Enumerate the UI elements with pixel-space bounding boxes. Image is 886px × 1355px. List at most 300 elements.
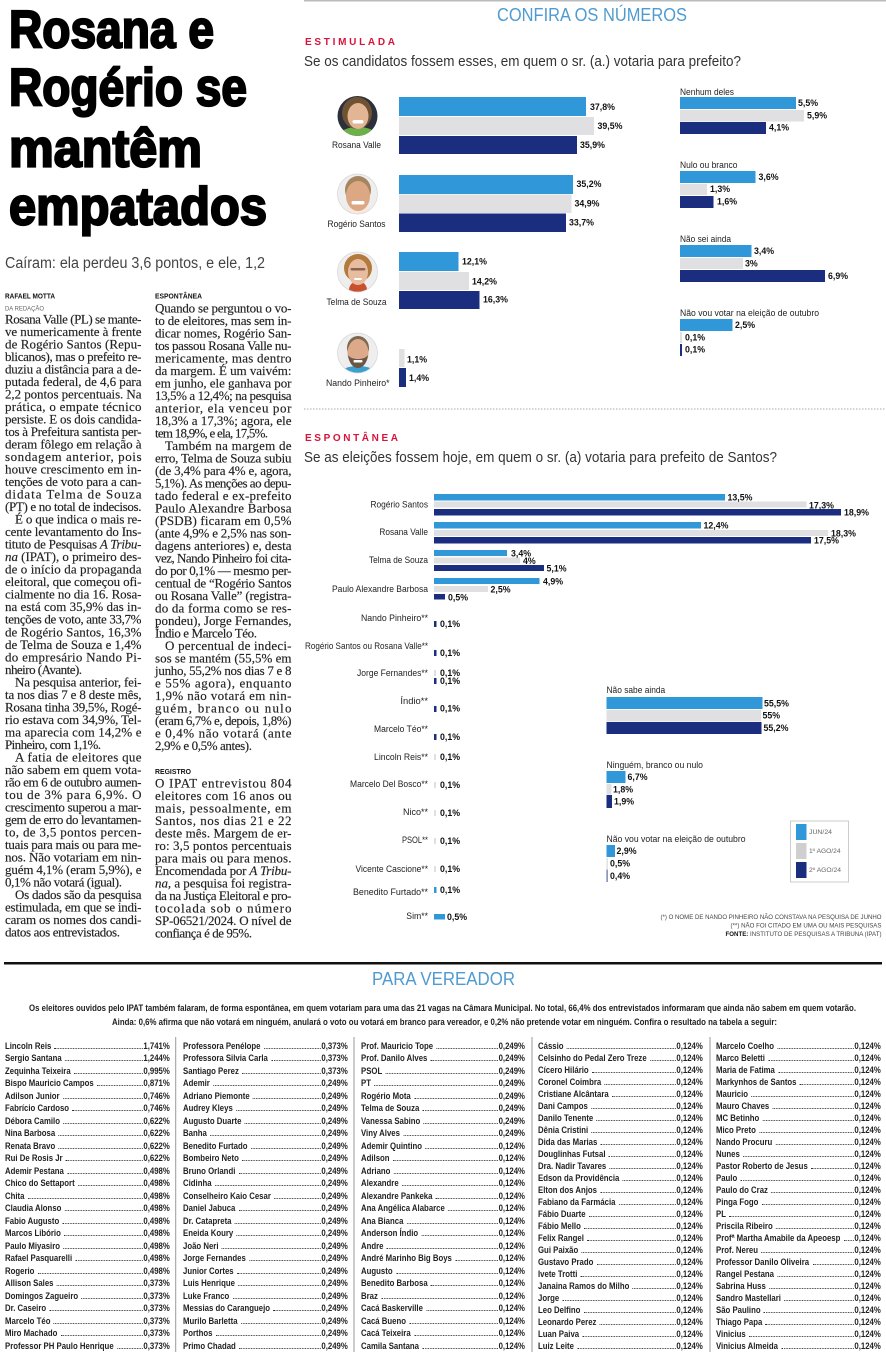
bar chart: espontânea candidates: Benedito Furtado** [353,887,428,897]
table column 1: Marcos Libório 0,498% [5,1228,170,1239]
article text: column 1: Pinheiro, com 1,1%. [5,737,101,752]
bar chart: espontânea candidates: 0,1% [440,808,460,818]
table column 1: Domingos Zagueiro 0,373% [5,1291,170,1302]
candidate: Rogério Santos: 33,7% [569,218,594,228]
article text: column 1: tenções de voto, ante 33,7% [5,612,142,627]
table column 2: Junior Cortes 0,249% [183,1266,348,1277]
article text: column 2: Índio e Marcelo Téo. [155,626,257,640]
table column 4 [538,1040,703,1352]
bar chart: espontânea candidates: Rogério Santos ou Rosana Valle** [305,641,428,651]
table column 2: Eneida Koury 0,249% [183,1228,348,1239]
table column 4: Fabiano da Farmácia 0,124% [538,1197,703,1208]
table column 3: Ana Angélica Alabarce 0,124% [361,1203,525,1214]
table column 1: Miro Machado 0,373% [5,1328,170,1339]
article text: column 2: 18,3% a 17,3%; agora, ele [155,413,292,428]
article text: column 2: Quando se perguntou o vo- [155,300,292,316]
article text: column 2: (PSDB) ficaram em 0,5% [155,513,292,528]
candidate: Rosana Valle: 37,8% [590,102,615,112]
article text: column 2: centual de “Rogério Santos [155,576,292,590]
article text: column 1: nheiro (Avante). [5,662,82,677]
table column 1: Sergio Santana 1,244% [5,1053,170,1064]
article text: column 2: vez, Nando Pinheiro foi cita- [155,550,292,566]
table column 3: Telma de Souza 0,249% [361,1103,525,1114]
table column 2: Jorge Fernandes 0,249% [183,1253,348,1264]
table column 1: Allison Sales 0,373% [5,1278,170,1289]
article text: column 1: prática, o empate técnico [5,399,142,414]
byline: RAFAEL MOTTA [5,294,55,300]
table column 4: Felix Rangel 0,124% [538,1233,703,1244]
table column 4: Fábio Duarte 0,124% [538,1209,703,1220]
legend: 1º AGO/24 [809,848,841,855]
article text: column 1: do empresário Nando Pi- [5,649,142,664]
heading: confira os números: CONFIRA OS NÚMEROS [497,4,687,25]
table column 1: Lincoln Reis 1,741% [5,1040,170,1052]
article text: column 2: 13,5% a 12,4%; na pesquisa [155,388,292,403]
chart: não vou votar: 0,1% [685,332,705,342]
footnotes: (**) NÃO FOI CITADO EM UMA OU MAIS PESQUISAS [730,920,882,930]
table column 2: Luis Henrique 0,249% [183,1278,348,1289]
candidate: Rogério Santos [328,174,602,232]
table column 4: Cícero Hilário 0,124% [538,1065,703,1076]
chart: nulo ou branco: Nulo ou branco [680,160,738,170]
table column 3: Adilson 0,124% [361,1153,525,1164]
table column 3: Augusto 0,124% [361,1266,525,1277]
bar chart: espontânea candidates: 0,1% [440,619,460,629]
candidate: Telma de Souza [326,252,508,309]
candidate: Telma de Souza: 14,2% [472,276,497,286]
article text: column 1: Rosana Valle (PL) se mante- [5,312,142,326]
table column 4: Dênia Cristini 0,124% [538,1125,703,1136]
article text: registro: confiança é de 95%. [155,926,252,940]
table column 1: Nina Barbosa 0,622% [5,1128,170,1139]
table column 5: Nunes 0,124% [716,1149,881,1160]
table column 1: Fabio Augusto 0,498% [5,1216,170,1227]
bar chart: espontânea candidates: Rosana Valle [379,527,428,537]
table column 1: Débora Camilo 0,622% [5,1116,170,1127]
bar chart: espontânea candidates: 4,9% [543,576,563,586]
subheading: registro: REGISTRO [155,769,192,776]
candidate: Rosana Valle: 35,9% [580,140,605,150]
article text: column 1: houve crescimento em in- [5,462,142,477]
footnotes: FONTE: INSTITUTO DE PESQUISAS A TRIBUNA (IPAT) [726,931,882,938]
article text: column 2: pondeu), Jorge Fernandes, [155,613,292,628]
table column 4: Luan Paiva 0,124% [538,1329,703,1340]
table column 4: Jorge 0,124% [538,1293,703,1304]
article text: column 1: de Telma de Souza e 1,4% [5,637,142,652]
chart: não sei ainda: Não sei ainda [680,234,731,244]
chart: não sabe ainda: Não sabe ainda [606,685,665,695]
bar chart: espontânea candidates: Índio** [400,696,429,706]
table column 1: Marcelo Téo 0,373% [5,1316,170,1327]
table column 4: Gustavo Prado 0,124% [538,1257,703,1268]
article text: column 1: tenções de voto para a can- [5,474,142,489]
title: Rogério se [9,58,247,118]
table column 1: Rogerio 0,498% [5,1266,170,1277]
table column 2: Adriano Piemonte 0,249% [183,1091,348,1102]
table column 4: Fábio Mello 0,124% [538,1221,703,1232]
table column 2: Conselheiro Kaio Cesar 0,249% [183,1191,348,1202]
article text: column 2: Paulo Alexandre Barbosa [155,500,292,516]
article text: column 2: (de 3,4% para 4% e, agora, [155,463,292,478]
bar chart: espontânea candidates: 3,4% [511,548,531,558]
table column 3: Rogério Mota 0,249% [361,1091,525,1102]
article text: column 1: eleitoral, que começou ofi- [5,574,142,589]
article text: registro: Santos, nos dias 21 e 22 [155,813,292,828]
table column 4: Celsinho do Pedal Zero Treze 0,124% [538,1053,703,1064]
candidate: Nando Pinheiro [326,333,429,388]
bar chart: espontânea candidates: 5,1% [546,564,567,574]
article text: column 1: guém 4,1% (eram 5,9%), e [5,862,142,877]
table column 3 [361,1040,525,1352]
candidate: Telma de Souza: 16,3% [483,294,508,304]
candidate: Rogério Santos: 35,2% [576,179,602,189]
table column 4: Danilo Tenente 0,124% [538,1113,703,1124]
article text: column 1: na (IPAT), o primeiro des- [5,549,142,564]
candidate: Telma de Souza: 12,1% [462,256,487,266]
chart: nulo ou branco [680,160,779,208]
table column 5 [716,1040,881,1352]
legend: JUN/24 [809,829,832,836]
bar chart: espontânea candidates: 17,3% [809,500,834,510]
article text: column 1: duziu a distância para a de- [5,362,142,377]
chart: não vou votar na eleição [606,834,746,882]
table column 2: Messias do Caranguejo 0,249% [183,1303,348,1314]
icon: portrait Rogério Santos [338,174,377,214]
table column 1: Dr. Caseiro 0,373% [5,1303,170,1314]
table column 5: Maria de Fatima 0,124% [716,1065,881,1076]
chart: ninguém, branco ou nulo: 1,8% [613,784,633,794]
chart: não vou votar: 2,5% [735,320,755,330]
article text: column 2: e 55% agora), enquanto [155,676,292,690]
candidate: Rosana Valle [332,96,623,154]
article text: column 2: (eram 6,7% e, depois, 1,8%) [155,713,292,728]
article text: registro: ro: 3,5 pontos percentuais [155,838,292,853]
candidate: Rosana Valle: 39,5% [598,121,623,131]
table column 4: Dani Campos 0,124% [538,1101,703,1112]
bar chart: espontânea candidates: Sim** [406,911,428,921]
bar chart: espontânea candidates: Rogério Santos [370,500,428,510]
intro text: vereador [29,1003,856,1027]
icon: portrait Nando Pinheiro [338,334,377,373]
article text: column 2: to de eleitores, mas sem in- [155,313,292,328]
table column 3: Benedito Barbosa 0,124% [361,1278,525,1289]
article text: column 2: (ante 4,9% e 2,5% nas son- [155,526,292,540]
table column 5: Pastor Roberto de Jesus 0,124% [716,1161,881,1172]
table column 5: Sandro Mastellari 0,124% [716,1293,881,1304]
chart: não sabe ainda: 55,2% [764,723,789,733]
chart: ninguém, branco ou nulo [606,760,703,808]
table column 5: PL 0,124% [716,1209,881,1220]
table column 3: Adriano 0,124% [361,1166,525,1177]
bar chart: espontânea candidates: 0,1% [440,676,460,686]
article text: column 1: cialmente no dia 16. Rosa- [5,587,142,602]
chart: ninguém, branco ou nulo: 1,9% [614,796,634,806]
subheading: espontânea: ESPONTÂNEA [155,292,202,300]
table column 4: Ivete Trotti 0,124% [538,1269,703,1280]
icon: portrait Telma de Souza [338,252,377,292]
byline [5,294,55,312]
article text: column 2: dagens anteriores) e, desta [155,538,292,553]
article text: registro: deste mês. Margem de er- [155,826,292,840]
table column 3: Vanessa Sabino 0,249% [361,1116,525,1127]
table column 2: Primo Chadad 0,249% [183,1341,348,1352]
table column 5: São Paulino 0,124% [716,1305,881,1316]
chart: não sei ainda: 6,9% [828,271,848,281]
article text: column 1: crescimento superou a mar- [5,799,142,814]
table column 4: Leonardo Perez 0,124% [538,1317,703,1328]
bar chart: espontânea candidates [305,492,869,922]
chart: nenhum deles: 4,1% [769,122,789,132]
article text: column 1: 2,2 pontos percentuais. Na [5,387,142,402]
bar chart: espontânea candidates: Nico** [403,807,428,817]
candidate: Nando Pinheiro: 1,1% [407,354,427,364]
article text: column 1: tuais para mais ou para me- [5,837,142,852]
table column 2: Bruno Orlandi 0,249% [183,1166,348,1177]
footnotes [660,912,882,938]
bar chart: espontânea candidates: 13,5% [728,492,753,502]
article text: column 1: Na pesquisa anterior, fei- [15,674,142,689]
article text: column 2: Também na margem de [165,438,292,453]
table column 2: Bombeiro Neto 0,249% [183,1153,348,1164]
article text: column 1: ve numericamente à frente [5,324,142,339]
table column 4: Janaina Ramos do Milho 0,124% [538,1281,703,1292]
table column 2: Augusto Duarte 0,249% [183,1116,348,1127]
table column 4: Edson da Providência 0,124% [538,1173,703,1184]
candidate: Rogério Santos: 34,9% [574,198,600,208]
table column 1: Paulo Miyasiro 0,498% [5,1241,170,1252]
bar chart: espontânea candidates: 17,5% [814,536,839,546]
bar chart: espontânea candidates: Telma de Souza [369,555,428,565]
table column 3: Anderson Índio 0,124% [361,1228,525,1239]
bar chart: espontânea candidates: 0,1% [440,780,460,790]
article text: column 2: mericamente, mas dentro [155,350,292,366]
chart: não sabe ainda: 55,5% [764,698,789,708]
table column 2: Professora Penélope 0,373% [183,1040,348,1052]
heading: para vereador: PARA VEREADOR [372,969,515,989]
table column 3: PT 0,249% [361,1078,525,1089]
table column 3: Braz 0,124% [361,1291,525,1302]
table column 3: Cacá Bueno 0,124% [361,1316,525,1327]
table column 4: Douglinhas Futsal 0,124% [538,1149,703,1160]
chart: não sei ainda: 3,4% [754,246,774,256]
chart: nulo ou branco: 3,6% [758,172,779,182]
table column 5: Priscila Ribeiro 0,124% [716,1221,881,1232]
article text: registro: tocolada sob o número [155,900,292,916]
chart: ninguém, branco ou nulo: Ninguém, branco ou nulo [606,760,703,770]
table column 3: Ademir Quintino 0,124% [361,1141,525,1152]
table column 2: João Neri 0,249% [183,1241,348,1252]
table column 1: Rafael Pasquarelli 0,498% [5,1253,170,1264]
table column 3: Alexandre Pankeka 0,124% [361,1191,525,1202]
question: estimulada: Se os candidatos fossem esses, em quem o sr. (a.) votaria para prefeito? [304,53,741,70]
table column 5: Sabrina Huss 0,124% [716,1281,881,1292]
bar chart: espontânea candidates: 0,1% [440,732,460,742]
chart: não sei ainda: 3% [745,258,758,268]
table column 2: Ademir 0,249% [183,1078,348,1089]
article text: column 2 [154,300,292,753]
article text: column 1: de o início da propaganda [5,562,142,577]
bar chart: espontânea candidates: Nando Pinheiro** [361,613,428,623]
table column 5: MC Betinho 0,124% [716,1113,881,1124]
bar chart: espontânea candidates: 0,1% [440,885,460,895]
table column 3: PSOL 0,249% [361,1066,525,1077]
article text: registro: Encomendada por A Tribu- [155,863,292,878]
table column 2: Luke Franco 0,249% [183,1291,348,1302]
article text: column 1: É o que indica o mais re- [15,512,142,527]
article text: registro: O IPAT entrevistou 804 [155,776,292,790]
bar chart: espontânea candidates: 0,1% [440,704,460,714]
section label: estimulada: ESTIMULADA [305,37,395,48]
article text: column 1: estimulada, em que se indi- [5,900,142,914]
chart: não sabe ainda [606,685,789,734]
table column 5: Vinicius Almeida 0,124% [716,1341,881,1352]
article text: registro: SP-06521/2024. O nível de [155,913,292,928]
chart: nenhum deles: 5,5% [798,98,818,108]
chart: nenhum deles [680,87,827,134]
table column 2: Dr. Catapreta 0,249% [183,1216,348,1227]
article text: column 1: ta nos dias 7 e 8 deste mês, [5,687,142,702]
table column 5: Profª Martha Amabile da Apeoesp 0,124% [716,1233,881,1244]
table column 4: Dida das Marias 0,124% [538,1137,703,1148]
article text: column 1: nos. Não votariam em nin- [5,849,142,864]
title: empatados [9,178,267,236]
table column 2: Benedito Furtado 0,249% [183,1141,348,1152]
article text: column 2: dicar nomes, Rogério San- [155,326,292,340]
byline: DA REDAÇÃO [5,304,44,312]
bar chart: espontânea candidates: Lincoln Reis** [374,752,428,762]
legend [790,821,848,882]
table column 3: Viny Alves 0,249% [361,1128,525,1139]
table column 4: Cristiane Alcântara 0,124% [538,1089,703,1100]
table column 1: Bispo Mauricio Campos 0,871% [5,1078,170,1089]
bar chart: espontânea candidates: 0,1% [440,648,460,658]
table column 5: Nando Procuru 0,124% [716,1137,881,1148]
bar chart: espontânea candidates: Jorge Fernandes** [357,668,428,678]
article text: registro: mais, pessoalmente, em [155,800,292,816]
article text: column 1: putada federal, de 4,6 para [5,374,142,389]
article text: column 2: 1,9% não votará em nin- [155,688,292,703]
table column 1: Fabrício Cardoso 0,746% [5,1103,170,1114]
bar chart: espontânea candidates: 0,1% [440,864,460,874]
article text: column 1: blicanos), mas o prefeito re- [5,349,142,364]
table column 3: Ana Bianca 0,124% [361,1216,525,1227]
table column 3: Cacá Baskerville 0,124% [361,1303,525,1314]
bar chart: espontânea candidates: 0,1% [440,836,460,846]
table column 3: Prof. Mauricio Tope 0,249% [361,1040,525,1052]
article text: column 1: cente levantamento do Ins- [5,524,142,539]
chart: não vou votar na eleição: 0,5% [610,858,630,868]
table column 5: Rangel Pestana 0,124% [716,1269,881,1280]
article text: column 1: de Rogério Santos, 16,3% [5,624,142,639]
chart: não vou votar: Não vou votar na eleição de outubro [680,308,819,318]
table column 2: Audrey Kleys 0,249% [183,1103,348,1114]
chart: ninguém, branco ou nulo: 6,7% [628,772,648,782]
chart: nenhum deles: Nenhum deles [680,87,734,97]
article text: column 2: do da forma como se res- [155,600,292,616]
chart: não vou votar na eleição: 0,4% [610,871,630,881]
article text: column 1: deram fôlego em relação à [5,437,142,452]
bar chart: espontânea candidates: PSOL** [402,835,428,845]
bar chart: espontânea candidates: 2,5% [490,584,511,594]
article text: column 1: Os dados são da pesquisa [15,887,142,902]
bar chart: espontânea candidates: 18,9% [844,508,869,518]
article text: column 2: em junho, ele ganhava por [155,376,292,390]
article text: column 1: ma aparecia com 14,2% e [5,724,142,739]
table column 3: Cacá Teixeira 0,124% [361,1328,525,1339]
table column 4: Coronel Coimbra 0,124% [538,1077,703,1088]
chart: nenhum deles: 5,9% [807,110,827,120]
section label: espontânea: ESPONTÂNEA [305,431,398,444]
table column 3: Prof. Danilo Alves 0,249% [361,1053,525,1064]
article text: column 1: de Rogério Santos (Repu- [5,336,142,352]
article text: column 1: A fatia de eleitores que [15,749,142,764]
article text: registro: na, a pesquisa foi registra- [155,876,292,890]
article text: column 1: sondagem anterior, pois [5,449,142,464]
table column 2: Cidinha 0,249% [183,1178,348,1189]
table column 1 [5,1040,170,1352]
candidate: Nando Pinheiro: Nando Pinheiro* [326,378,390,388]
table column 5: Vinicius 0,124% [716,1329,881,1340]
candidate: Telma de Souza: Telma de Souza [326,297,386,307]
table column 5: Mico Preto 0,124% [716,1125,881,1136]
table column 1: Chico do Settaport 0,498% [5,1178,170,1189]
article text: registro: eleitores com 16 anos ou [155,788,292,803]
table column 2: Banha 0,249% [183,1128,348,1139]
table column 1: Renata Bravo 0,622% [5,1141,170,1152]
table column 3: Alexandre 0,124% [361,1178,525,1189]
title: mantêm [9,120,202,178]
table column 1: Chita 0,498% [5,1191,170,1202]
table column 3: Camila Santana 0,124% [361,1341,525,1352]
bar chart: espontânea candidates: Marcelo Del Bosco** [350,779,428,789]
bar chart: espontânea candidates: Vicente Cascione** [356,864,428,874]
title [9,0,267,236]
article text: column 2: ou Rosana Valle” (registra- [155,588,292,603]
article text: column 1: 0,1% não votará (igual). [5,874,122,889]
article text: column 1: tos à Prefeitura santista per- [5,424,142,439]
chart: nulo ou branco: 1,6% [717,196,737,206]
candidate: Nando Pinheiro: 1,4% [409,373,429,383]
article text: column 1: to, de 3,5 pontos percen- [5,824,142,839]
article text: column 2: sos se mantém (55,5% em [155,650,292,666]
table column 5: Pinga Fogo 0,124% [716,1197,881,1208]
bar chart: espontânea candidates: 0,5% [448,592,468,602]
table column 5: Paulo do Craz 0,124% [716,1185,881,1196]
chart: nulo ou branco: 1,3% [710,184,730,194]
article text: column 1: não sabem em quem vota- [5,762,142,777]
question: espontânea: Se as eleições fossem hoje, em quem o sr. (a) votaria para prefeito de Santos? [304,449,777,466]
bar chart: espontânea candidates: 0,1% [440,752,460,762]
table column 5: Professor Danilo Oliveira 0,124% [716,1257,881,1268]
article text: column 1: caram os nomes dos candi- [5,912,142,927]
table column 2: Daniel Jabuca 0,249% [183,1203,348,1214]
table column 2: Murilo Barletta 0,249% [183,1316,348,1327]
table column 2: Porthos 0,249% [183,1328,348,1339]
article text: column 2: e 0,4% não votará (ante [155,726,292,740]
article text: column 2: da margem. É um vaivém: [155,363,292,378]
article text: column 1: tou de 3% para 6,9%. O [5,787,142,802]
bar chart: espontânea candidates: Paulo Alexandre Barbosa [332,584,428,594]
table column 4: Gui Paixão 0,124% [538,1245,703,1256]
candidate: Rogério Santos: Rogério Santos [328,219,386,229]
legend: 2º AGO/24 [809,867,841,874]
title: Rosana e [9,0,214,60]
article text: column 1: Rosana tinha 39,5%, Rogé- [5,699,142,714]
table column 1: Rui De Rosis Jr 0,622% [5,1153,170,1164]
table column 4: Luiz Leite 0,124% [538,1341,703,1352]
article text: registro [155,776,292,940]
table column 4: Cássio 0,124% [538,1040,703,1052]
